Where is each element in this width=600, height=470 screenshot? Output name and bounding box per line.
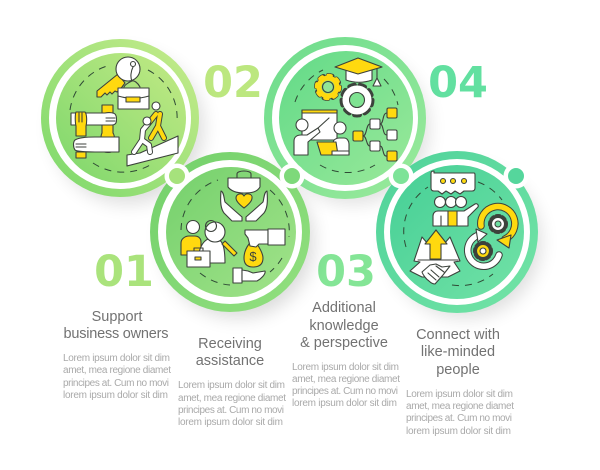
connector dot 1 xyxy=(164,164,190,188)
text block: step 3: & perspective xyxy=(300,335,388,351)
text block: step 2: Receiving xyxy=(198,336,262,352)
number 04: 04 xyxy=(428,58,488,108)
text block: step 4: lorem ipsum dolor sit dim xyxy=(406,426,511,437)
text block: step 2: amet, mea regione diamet xyxy=(178,393,286,404)
icon: team with speech bubble xyxy=(431,171,478,226)
text block: step 4: like-minded xyxy=(421,344,495,360)
icon: gears xyxy=(316,76,372,115)
text block: step 1: lorem ipsum dolor sit dim xyxy=(63,390,168,401)
text block: step 3: knowledge xyxy=(309,318,379,334)
icon: arrows and handshake xyxy=(410,230,460,284)
panel: step 2 circle xyxy=(150,152,314,318)
icon: key and briefcase xyxy=(97,57,149,109)
text block: step 3: principes at. Cum no movi xyxy=(292,386,398,397)
text block: step 4: Lorem ipsum dolor sit dim xyxy=(406,389,513,400)
icon: hierarchy tree xyxy=(353,108,397,161)
text block: step 3: Lorem ipsum dolor sit dim xyxy=(292,362,399,373)
icon: teacher at whiteboard with student xyxy=(294,110,349,155)
icon: graduation cap xyxy=(335,58,382,86)
text block: step 2: assistance xyxy=(196,353,264,369)
icon: rotating gears xyxy=(468,207,515,266)
number 02: 02 xyxy=(203,58,263,108)
icon: search and people xyxy=(181,220,237,267)
connector dot 2 xyxy=(280,164,304,188)
icon: hands and money bag xyxy=(233,229,285,283)
icon: climbers helping xyxy=(127,102,178,166)
text block: step 2: lorem ipsum dolor sit dim xyxy=(178,417,283,428)
text block: step 1: principes at. Cum no movi xyxy=(63,378,169,389)
panel: step 3 circle xyxy=(264,37,429,204)
panel: step 4 circle xyxy=(376,151,541,318)
text block: step 4: amet, mea regione diamet xyxy=(406,401,514,412)
text block: step 3: Additional xyxy=(312,300,376,316)
text block: step 1: Lorem ipsum dolor sit dim xyxy=(63,353,170,364)
text block: step 1 xyxy=(63,309,171,401)
text block: step 4: people xyxy=(436,362,480,378)
text block: step 2 xyxy=(178,336,286,428)
text block: step 4: Connect with xyxy=(416,327,500,343)
connector dot 3 xyxy=(388,164,414,188)
panel: step 1 circle xyxy=(41,39,204,204)
text block: step 2: principes at. Cum no movi xyxy=(178,405,284,416)
text block: step 3: amet, mea regione diamet xyxy=(292,374,400,385)
connector dot 4 xyxy=(504,164,528,188)
text block: step 3: lorem ipsum dolor sit dim xyxy=(292,398,397,409)
text block: step 3 xyxy=(292,300,400,409)
text block: step 4: principes at. Cum no movi xyxy=(406,413,512,424)
icon: four linked hands xyxy=(71,105,119,158)
text block: step 4 xyxy=(406,327,514,437)
text block: step 1: business owners xyxy=(64,326,168,342)
icon: charity hands with briefcase xyxy=(221,171,267,221)
text block: step 1: amet, mea regione diamet xyxy=(63,365,171,376)
text block: step 2: Lorem ipsum dolor sit dim xyxy=(178,380,285,391)
icon: hands and money bag: $ xyxy=(249,249,257,264)
number 03: 03 xyxy=(316,247,376,297)
number 01: 01 xyxy=(94,247,154,297)
text block: step 1: Support xyxy=(92,309,142,325)
